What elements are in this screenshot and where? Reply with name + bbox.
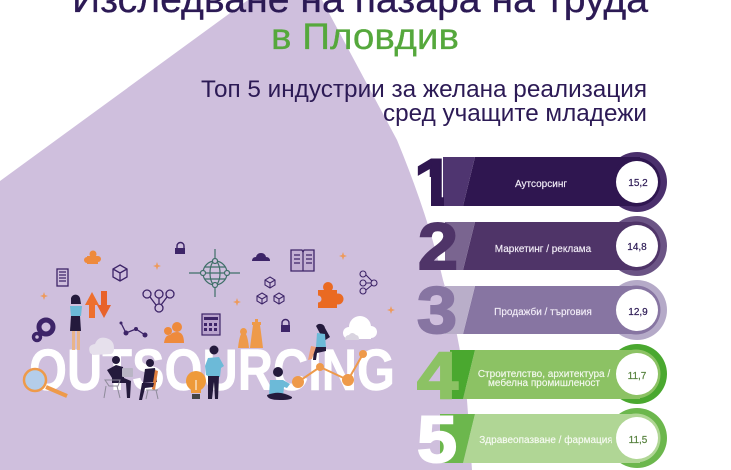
word OUTSOURCING: OUTSOURCING <box>29 338 395 403</box>
ranking row 4: мебелна промишленост <box>488 377 600 389</box>
figure: sitting man <box>267 367 292 400</box>
ranking row 1: 1 <box>414 145 454 219</box>
ranking row 2 <box>418 209 667 283</box>
ranking row 4: Строителство, архитектура / <box>478 369 610 380</box>
ranking row 2: 2 <box>418 209 458 283</box>
icon: lock left <box>175 243 185 254</box>
ranking row 1 <box>418 152 667 212</box>
icon: orange sparks <box>40 252 395 314</box>
ranking row 3: 3 <box>417 273 457 347</box>
icon: orange people <box>164 322 184 343</box>
figure: standing man <box>205 346 224 399</box>
icon: globe network <box>189 249 240 297</box>
icon: white cloud left <box>89 338 114 355</box>
icon: white clouds <box>343 316 377 340</box>
icon: lock right <box>281 320 290 332</box>
ranking row 5: Здравеопазване / фармация <box>479 434 613 446</box>
icon: small puzzle <box>84 250 101 264</box>
icon: line graph <box>120 322 148 338</box>
ranking row 3 <box>417 273 667 347</box>
icon: calculator <box>202 314 220 335</box>
figure: sitting woman <box>308 324 330 360</box>
icon: book <box>291 250 314 271</box>
ranking row 4: 11,7 <box>628 371 647 382</box>
ranking row 3: Продажби / търговия <box>494 306 592 318</box>
icon: cube <box>113 265 127 281</box>
icon: dark cloud <box>252 253 270 261</box>
subtitle: сред учащите младежи <box>383 100 647 127</box>
figure: standing woman <box>70 295 82 350</box>
icon: gears <box>34 320 53 340</box>
ranking row 2: Маркетинг / реклама <box>495 244 592 255</box>
subtitle <box>201 76 647 127</box>
figure: man at laptop <box>104 356 131 398</box>
icon: up and down arrows <box>85 291 111 318</box>
figure: woman at laptop <box>139 359 158 400</box>
title: в Пловдив <box>271 16 459 57</box>
ranking row 4: 4 <box>417 338 458 412</box>
icon: laptop <box>122 368 133 377</box>
icon: document <box>57 269 68 286</box>
ranking row 2: 14,8 <box>627 242 647 253</box>
ranking row 5: 11,5 <box>629 435 648 446</box>
icon: node tree left <box>143 290 174 312</box>
ranking row 4 <box>417 338 667 412</box>
icon: light bulb <box>186 371 206 399</box>
title <box>72 0 649 57</box>
orange trend line <box>292 350 367 388</box>
outsourcing illustration <box>24 243 395 403</box>
ranking row 5 <box>417 402 667 470</box>
background purple shape <box>0 0 472 470</box>
icon: chess pieces <box>238 319 263 348</box>
icon: large puzzle <box>314 282 344 308</box>
icon: node tree right <box>360 271 377 294</box>
subtitle: Топ 5 индустрии за желана реализация <box>201 76 647 103</box>
icon: connected cubes <box>257 277 284 304</box>
ranking row 1: 15,2 <box>628 178 648 189</box>
ranking row 3: 12,9 <box>628 307 648 318</box>
ranking row 1: Аутсорсинг <box>515 179 567 190</box>
icon: magnifier <box>24 369 67 396</box>
